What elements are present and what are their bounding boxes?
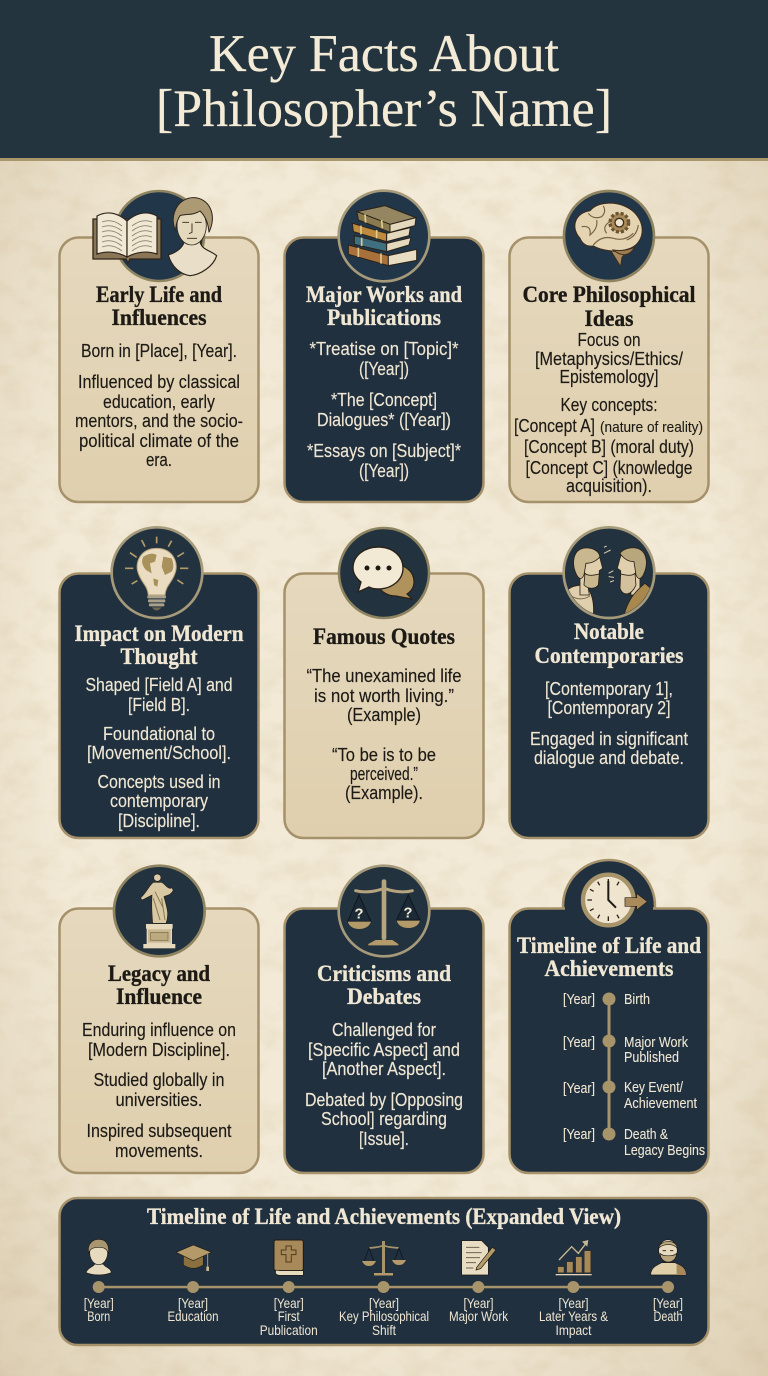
timeline labels: Key Event/ [624,1079,684,1096]
heading: Ideas [584,306,634,331]
heading [96,282,222,330]
body text: Influenced by classical [78,372,240,392]
body text [75,341,243,470]
timeline labels [563,991,705,1159]
body text: [Specific Aspect] and [308,1040,460,1060]
body text: School] regarding [321,1109,447,1129]
heading: Impact on Modern [74,621,244,646]
body text: [Contemporary 2] [548,698,670,718]
timeline labels: Born [87,1308,110,1324]
body text: ([Year]) [359,461,409,481]
heading: Debates [347,984,421,1009]
title banner [0,0,768,161]
icon: graduation cap [176,1245,212,1271]
heading: Publications [327,305,441,330]
body text: [Modern Discipline]. [88,1040,230,1060]
timeline labels: Major Work [449,1308,509,1324]
timeline labels: [Year] [563,1126,595,1143]
body text: (nature of reality) [600,419,703,436]
icon: elder philosopher bust [651,1240,686,1275]
panel: legacy and influence [60,866,258,1173]
heading: Notable [574,619,644,644]
body text: Focus on [578,330,640,350]
heading: Achievements [544,956,674,981]
body text: *Essays on [Subject]* [307,441,461,461]
body text [306,666,462,803]
heading [534,619,684,668]
timeline labels: Major Work [624,1034,688,1051]
body text: mentors, and the socio- [75,411,243,431]
panel: timeline of life and achievements [510,860,708,1173]
body text: universities. [116,1090,202,1110]
timeline labels: [Year] [84,1295,114,1311]
icon: scales with question marks: ? [355,906,364,922]
heading: Early Life and [96,282,222,307]
body text: [Issue]. [359,1129,409,1149]
heading [74,621,244,669]
icon: manuscript and quill [462,1241,496,1275]
heading: Timeline of Life and [517,933,701,958]
body text: Epistemology] [560,367,658,387]
body text: [Concept B] (moral duty) [524,437,694,457]
body text: political climate of the [79,431,239,451]
heading [108,961,210,1009]
panel: impact on modern thought [60,527,258,838]
heading: Timeline of Life and Achievements (Expanded View) [147,1204,621,1229]
body text: contemporary [110,791,208,811]
body text: acquisition). [566,476,652,496]
icon: bible book [274,1240,303,1275]
icon: clock with arrow [583,875,647,925]
timeline labels: [Year] [563,1080,595,1097]
icon: small scales [362,1241,406,1276]
timeline labels: Shift [372,1322,396,1338]
timeline labels: [Year] [274,1295,304,1311]
body text [82,1020,236,1161]
body text [307,339,461,481]
timeline labels: [Year] [563,1034,595,1051]
panel: famous quotes [284,528,484,838]
icon: scales with question marks: ? [404,905,413,921]
icon: open book and young bust [93,191,217,281]
body text: [Movement/School]. [87,743,231,763]
timeline labels [84,1295,683,1338]
body text: Challenged for [332,1020,436,1040]
body text: [Contemporary 1], [545,679,673,699]
body text: [Field B]. [128,695,190,715]
heading: Major Works and [306,282,462,307]
timeline labels: [Year] [178,1295,208,1311]
panel: major works and publications [284,191,484,502]
body text: Born in [Place], [Year]. [81,341,237,361]
icon: speech bubbles [339,528,429,618]
body text: *The [Concept] [331,390,437,410]
vertical timeline [602,992,616,1140]
timeline labels: Achievement [624,1095,698,1112]
body text: [Another Aspect]. [322,1059,446,1079]
title: Key Facts About [209,25,559,83]
body text [86,675,232,831]
body text: Enduring influence on [82,1020,236,1040]
timeline labels: Impact [556,1322,592,1338]
heading: Criticisms and [317,961,451,986]
body text: [Concept C] (knowledge [526,458,692,478]
icon: statue on pedestal [114,866,205,956]
body text: “To be is to be [332,745,436,765]
timeline labels: Key Philosophical [339,1308,429,1324]
body text: [Metaphysics/Ethics/ [535,349,683,369]
heading: Thought [120,644,198,669]
panel: expanded timeline [60,1198,708,1345]
panel: early life and influences [60,191,258,502]
icon: stack of books [339,191,429,281]
icon: young bust [86,1239,111,1275]
heading: Contemporaries [534,643,684,668]
timeline labels: Published [624,1049,679,1066]
timeline labels: Legacy Begins [624,1142,705,1159]
timeline labels: [Year] [464,1295,494,1311]
icon: scales with question marks [339,866,429,956]
icon: two debating philosophers [564,527,657,618]
body text: Shaped [Field A] and [86,675,232,695]
body text: “The unexamined life [306,666,462,686]
body text [305,1020,463,1149]
panel: core philosophical ideas [510,191,708,502]
timeline labels: [Year] [369,1295,399,1311]
timeline labels: Death & [624,1126,668,1143]
body text: is not worth living.” [314,686,454,706]
body text: Concepts used in [98,772,220,792]
title: [Philosopher’s Name] [156,80,612,138]
body text: (Example). [345,783,423,803]
timeline labels: [Year] [653,1295,683,1311]
body text [514,330,703,496]
body text [530,679,688,768]
body text: Debated by [Opposing [305,1090,463,1110]
timeline labels: Birth [624,991,650,1008]
heading: Core Philosophical [522,282,696,307]
heading [517,933,701,981]
body text: dialogue and debate. [534,748,684,768]
body text: ([Year]) [359,359,409,379]
body text: Dialogues* ([Year]) [317,410,451,430]
timeline labels: [Year] [563,991,595,1008]
icon: light bulb with globe [112,527,202,618]
body text: era. [146,450,172,470]
heading: Legacy and [108,961,210,986]
horizontal timeline [93,1281,674,1293]
body text: Studied globally in [94,1070,224,1090]
icon: brain with gear [564,191,654,281]
body text: Engaged in significant [530,729,688,749]
timeline labels: Death [654,1308,682,1324]
timeline labels: Education [168,1308,218,1324]
body text: perceived.” [350,764,418,784]
heading: Famous Quotes [313,624,455,649]
heading [306,282,462,330]
body text: Foundational to [103,724,215,744]
icon: rising bar chart [556,1240,592,1275]
body text: *Treatise on [Topic]* [310,339,458,359]
heading: Influences [112,305,207,330]
body text: Inspired subsequent [86,1121,232,1141]
heading [317,961,451,1009]
timeline labels: First [278,1308,300,1324]
timeline labels: Publication [260,1322,318,1338]
timeline labels: Later Years & [539,1308,609,1324]
body text: movements. [115,1141,203,1161]
heading [522,282,696,331]
title [156,25,612,138]
body text: (Example) [347,705,421,725]
body text: [Concept A] [514,416,595,436]
panel: notable contemporaries [510,527,708,838]
heading: Influence [116,984,202,1009]
body text: Key concepts: [560,395,658,415]
body text: [Discipline]. [118,811,200,831]
body text: education, early [103,392,215,412]
timeline labels: [Year] [558,1295,588,1311]
panel: criticisms and debates [284,866,484,1173]
